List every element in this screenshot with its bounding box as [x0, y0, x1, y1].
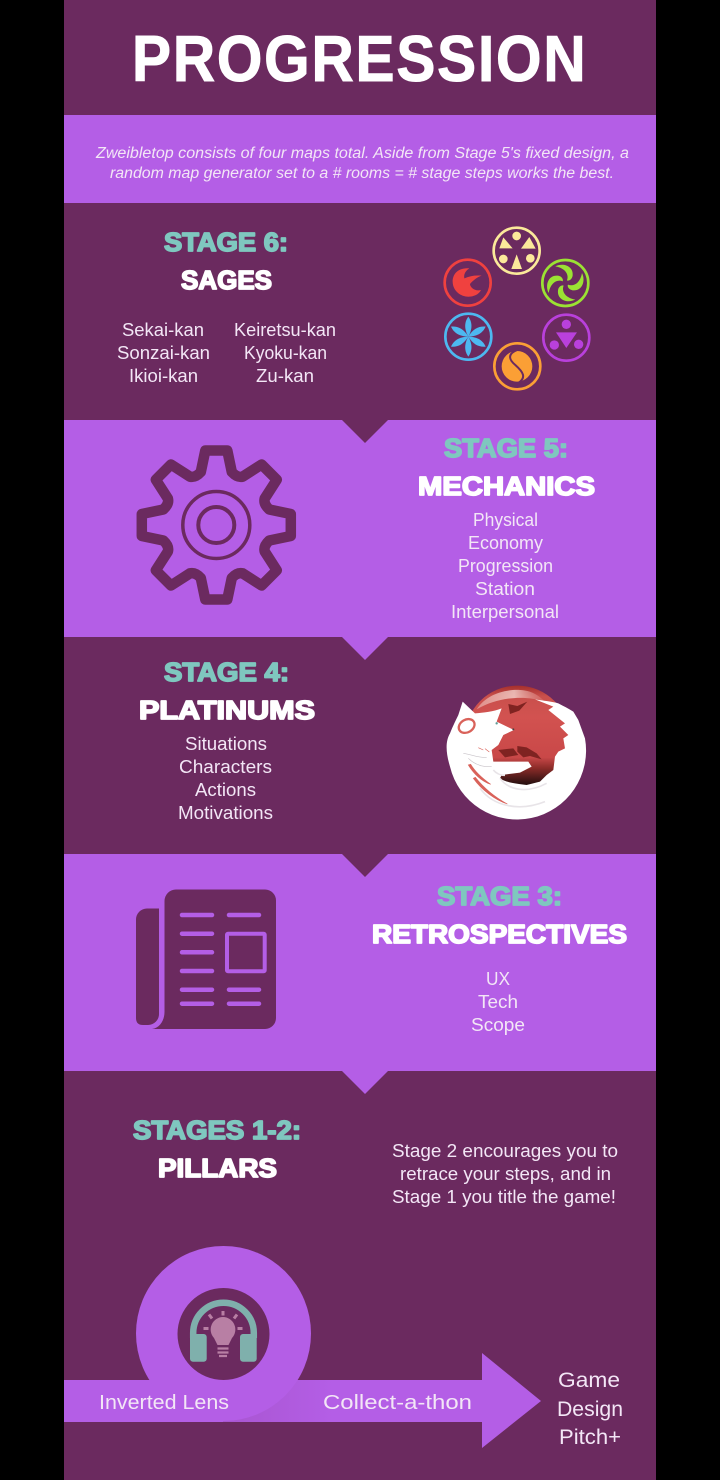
- description: retrace your steps, and in: [400, 1164, 611, 1184]
- list: platinums: Actions: [195, 780, 256, 800]
- label: game design pitch+: Design: [557, 1398, 623, 1421]
- list: sages: Sonzai-kan: [117, 343, 210, 363]
- emblem: yellow: [494, 228, 540, 274]
- icon: gear: [142, 450, 291, 600]
- list: retrospectives: Tech: [478, 992, 518, 1012]
- notch arrow: [342, 637, 388, 660]
- panel: intro: [64, 115, 656, 203]
- list: retrospectives: UX: [486, 969, 510, 989]
- inner circle: [178, 1288, 270, 1380]
- list: mechanics: Progression: [458, 556, 553, 576]
- list: platinums: Motivations: [178, 803, 273, 823]
- continents: [498, 702, 542, 759]
- description: [392, 1141, 618, 1207]
- panel: stages 1-2 pillars: [64, 1071, 656, 1480]
- label: inverted lens: Inverted Lens: [99, 1392, 229, 1414]
- list: mechanics: Physical: [473, 510, 538, 530]
- globe: [465, 686, 570, 791]
- list: sages: Ikioi-kan: [129, 366, 198, 386]
- list: mechanics: Economy: [468, 533, 543, 553]
- list: sages: [117, 320, 336, 386]
- icon: six sage emblems: [445, 228, 589, 389]
- heading: stage 3: STAGE 3:: [437, 881, 562, 911]
- list: platinums: [178, 734, 273, 823]
- heading: retrospectives: RETROSPECTIVES: [372, 919, 627, 949]
- title: PROGRESSION: [132, 23, 586, 96]
- notch arrow: [342, 854, 388, 877]
- panel: stage 4 platinums: [64, 637, 656, 854]
- heading: mechanics: MECHANICS: [418, 471, 595, 501]
- list: mechanics: Station: [475, 579, 535, 599]
- list: sages: Kyoku-kan: [244, 343, 327, 363]
- intro text: Zweibletop consists of four maps total. Aside from Stage 5's fixed design, a: [95, 145, 629, 162]
- list: mechanics: [451, 510, 559, 622]
- label: game design pitch+: [557, 1369, 623, 1449]
- label: game design pitch+: Pitch+: [559, 1426, 621, 1449]
- label: collect-a-thon: Collect-a-thon: [323, 1392, 472, 1414]
- emblem: red: [445, 260, 491, 306]
- heading: sages: SAGES: [181, 265, 272, 295]
- description: Stage 2 encourages you to: [392, 1141, 618, 1161]
- globe highlight: [477, 690, 545, 709]
- list: platinums: Situations: [185, 734, 267, 754]
- heading: stages 1-2: STAGES 1-2:: [133, 1115, 301, 1145]
- wolf markings: [456, 716, 514, 804]
- heading: stage 5: STAGE 5:: [444, 433, 568, 463]
- icon: headphones with light bulb: [190, 1303, 257, 1362]
- emblem: purple: [543, 315, 589, 361]
- label: game design pitch+: Game: [558, 1369, 620, 1392]
- list: platinums: Characters: [179, 757, 272, 777]
- wolf body and tail: [447, 699, 586, 820]
- heading: stage 4: STAGE 4:: [164, 657, 289, 687]
- icon: newspaper: [136, 890, 276, 1029]
- panel: stage 3 retrospectives: [64, 854, 656, 1071]
- emblem: blue: [445, 314, 491, 360]
- icon: white wolf globe: [447, 686, 586, 820]
- panel: stage 5 mechanics: [64, 420, 656, 637]
- list: sages: Zu-kan: [256, 366, 314, 386]
- panel: stage 6 sages: [64, 203, 656, 420]
- list: mechanics: Interpersonal: [451, 602, 559, 622]
- notch arrow: [342, 1071, 388, 1094]
- heading: platinums: PLATINUMS: [139, 695, 315, 725]
- wolf fur shading: [480, 770, 547, 807]
- heading: stage 6: STAGE 6:: [164, 227, 288, 257]
- intro text: [95, 145, 629, 182]
- heading: pillars: PILLARS: [158, 1153, 277, 1183]
- list: sages: Keiretsu-kan: [234, 320, 336, 340]
- arrow: [64, 1353, 541, 1448]
- emblem: orange: [494, 343, 540, 389]
- list: retrospectives: Scope: [471, 1015, 525, 1035]
- list: retrospectives: [471, 969, 525, 1035]
- description: Stage 1 you title the game!: [392, 1187, 616, 1207]
- circle badge: [136, 1246, 311, 1421]
- notch arrow: [342, 420, 388, 443]
- arrow shadow: [223, 1380, 333, 1422]
- intro text: random map generator set to a # rooms = # stage steps works the best.: [110, 165, 614, 182]
- emblem: green: [542, 260, 588, 306]
- list: sages: Sekai-kan: [122, 320, 204, 340]
